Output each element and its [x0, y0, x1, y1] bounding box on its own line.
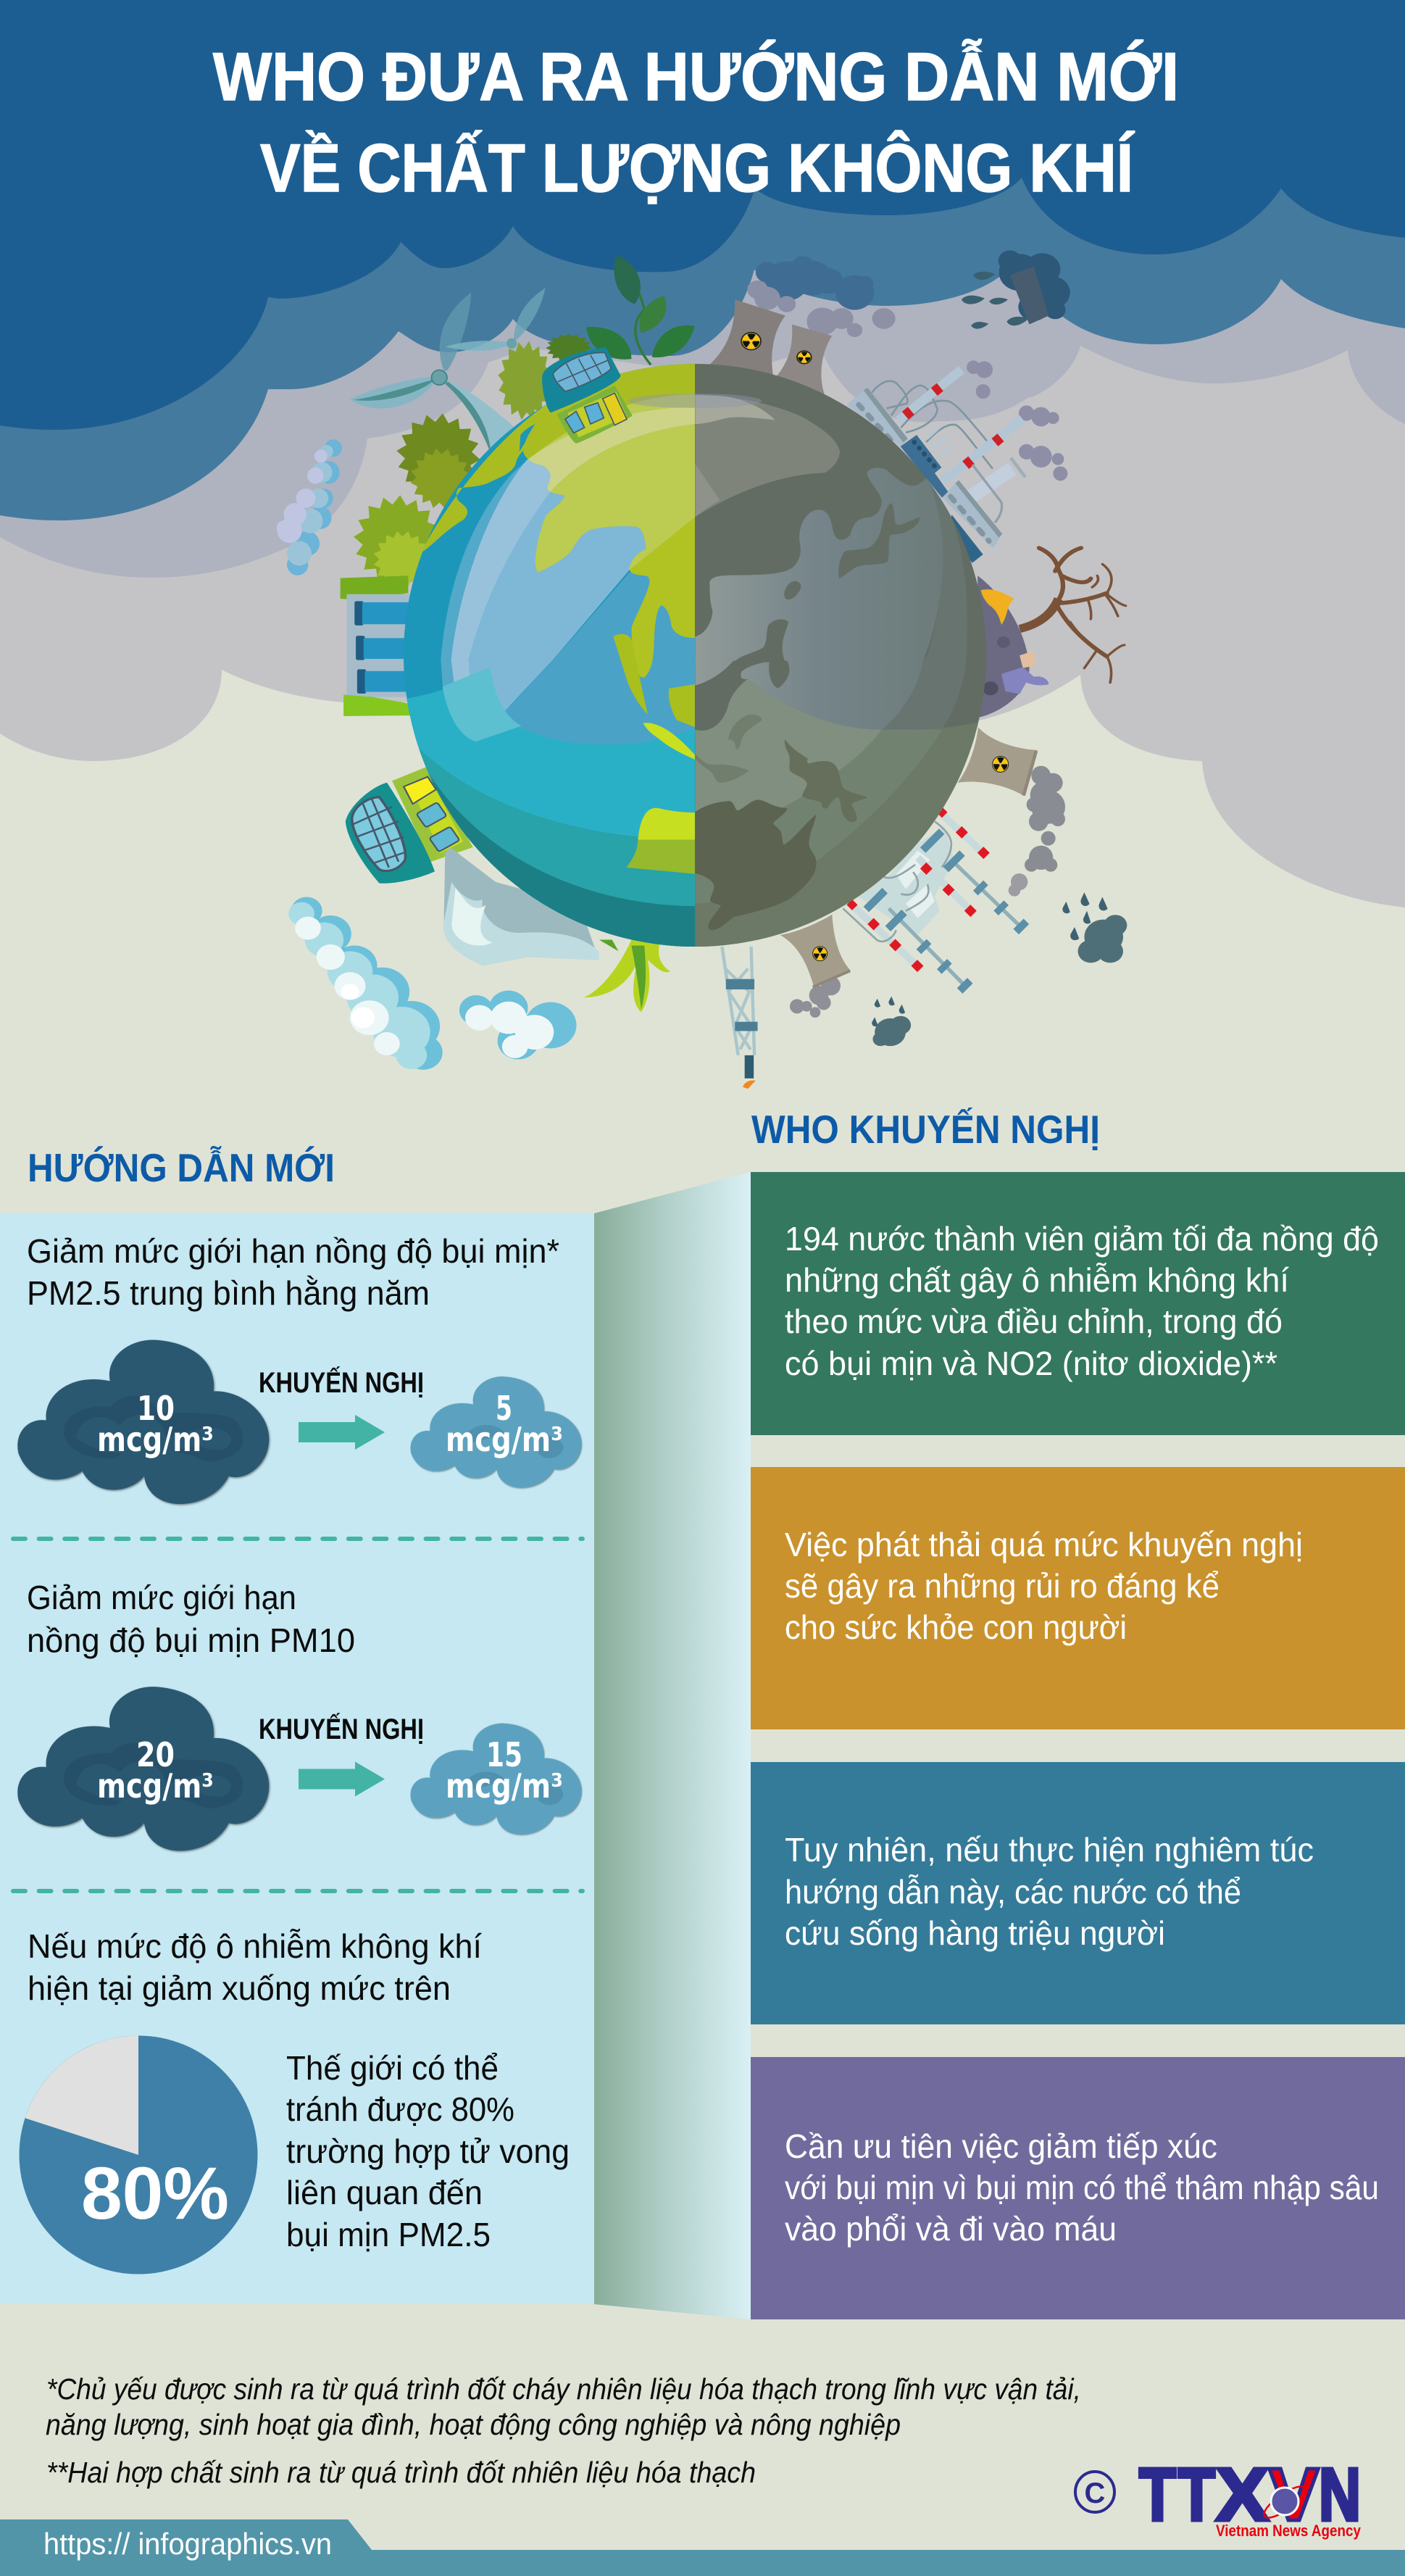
panel: recommendation 1: có bụi mịn và NO2 (nitơ dioxide)**	[785, 1345, 1277, 1382]
icon: nuclear tower and smoke right	[958, 727, 1065, 897]
icon: dark cloud 10	[17, 1340, 269, 1504]
arrow	[299, 1761, 385, 1796]
land: lower hemisphere tones	[695, 657, 988, 966]
text: PM2.5 guideline: Giảm mức giới hạn nồng độ bụi mịn*	[27, 1232, 559, 1270]
value: 10: mcg/m³	[97, 1420, 214, 1459]
value: 10: 10	[137, 1389, 175, 1428]
chart: 80 percent pie	[19, 2035, 258, 2274]
panel: left guidance background	[0, 1213, 594, 2304]
icon: solar house top	[542, 348, 633, 444]
panel: recommendation 1: 194 nước thành viên giảm tối đa nồng độ	[785, 1220, 1379, 1258]
title: VỀ CHẤT LƯỢNG KHÔNG KHÍ	[260, 129, 1135, 206]
panel: recommendation 2: sẽ gây ra những rủi ro đáng kể	[785, 1567, 1220, 1605]
text: PM10 guideline: Giảm mức giới hạn	[27, 1579, 296, 1616]
panel: recommendation 2: cho sức khỏe con người	[785, 1608, 1127, 1646]
globe: clean half	[399, 355, 698, 951]
logo: TTXVN: N	[1319, 2453, 1361, 2536]
icon: bottom left clouds	[288, 897, 577, 1070]
cloud layer: dark blue	[0, 0, 1405, 430]
value: 15: 15	[486, 1735, 522, 1774]
icon: cooling towers top	[701, 299, 832, 400]
text: deaths avoided: Thế giới có thể	[286, 2049, 499, 2087]
text: footnotes: năng lượng, sinh hoạt gia đình, hoạt động công nghiệp và nông nghiệp	[46, 2408, 901, 2441]
label: recommended: KHUYẾN NGHỊ	[259, 1366, 424, 1399]
chart: PM10 clouds	[17, 1687, 581, 1850]
text: footnotes: **Hai hợp chất sinh ra từ quá trình đốt nhiên liệu hóa thạch	[46, 2456, 756, 2489]
chart: PM2.5 clouds	[17, 1340, 581, 1504]
text: PM2.5 guideline: PM2.5 trung bình hằng năm	[27, 1274, 430, 1312]
icon: bottom plant	[583, 939, 670, 1012]
panel: recommendation 3	[751, 1762, 1405, 2024]
value: 20: mcg/m³	[97, 1766, 214, 1806]
panel: recommendation 1	[751, 1172, 1405, 1435]
icon: nuclear tower and smoke bottom	[780, 915, 850, 1018]
panel: recommendation 3: cứu sống hàng triệu người	[785, 1914, 1165, 1952]
logo: TTXVN: C	[1085, 2477, 1105, 2509]
icon: dark smoke top	[747, 256, 896, 337]
value: 20: 20	[136, 1735, 175, 1774]
cloud reflection on globe top	[628, 394, 762, 408]
heading: who recommends: WHO KHUYẾN NGHỊ	[751, 1107, 1100, 1152]
globe	[399, 355, 1000, 966]
icon: small pale cloud left	[277, 439, 342, 576]
icon: light cloud 15	[411, 1724, 581, 1835]
value: 15	[446, 1735, 563, 1806]
land: islands	[613, 634, 695, 874]
logo: TTXVN	[1075, 2453, 1362, 2540]
logo: TTXVN: T	[1178, 2453, 1215, 2536]
label: recommended: KHUYẾN NGHỊ	[259, 1712, 424, 1745]
logo: TTXVN: X	[1216, 2453, 1269, 2536]
arrow	[299, 1415, 385, 1450]
value: 5: 5	[496, 1389, 512, 1428]
text: deaths avoided	[286, 2049, 570, 2253]
text: PM10 guideline	[27, 1579, 355, 1659]
panel: recommendation 1: theo mức vừa điều chỉnh, trong đó	[785, 1302, 1283, 1340]
cloud layer: blue grey	[0, 217, 1405, 578]
text: pollution reduction	[28, 1927, 482, 2007]
land: northern continent	[422, 364, 695, 678]
logo: TTXVN: Vietnam News Agency	[1216, 2522, 1362, 2540]
panel: recommendation 3: Tuy nhiên, nếu thực hiện nghiêm túc	[785, 1831, 1314, 1869]
text: footnotes: *Chủ yếu được sinh ra từ quá trình đốt cháy nhiên liệu hóa thạch trong lĩnh vực vận tải,	[46, 2372, 1081, 2406]
icon: factory bottom right	[843, 807, 1029, 994]
cloud layer: light grey	[0, 290, 1405, 907]
text: deaths avoided: liên quan đến	[286, 2174, 483, 2211]
icon: oil rig	[722, 947, 758, 1089]
icon: wind turbines	[350, 288, 546, 457]
icon: left building	[341, 576, 414, 716]
value: 20	[97, 1735, 214, 1806]
land: upper continent and sea	[695, 395, 967, 661]
panel: recommendation 4: Cần ưu tiên việc giảm tiếp xúc	[785, 2127, 1217, 2165]
text: pollution reduction: Nếu mức độ ô nhiễm không khí	[28, 1927, 482, 1965]
icon: bottom left building	[346, 766, 473, 884]
icon: glacier	[443, 847, 599, 965]
panel: recommendation 4: vào phổi và đi vào máu	[785, 2210, 1117, 2248]
icon: dark cloud 20	[17, 1687, 269, 1850]
illustration: earth half clean half polluted	[277, 250, 1127, 1089]
title	[213, 38, 1179, 206]
logo: TTXVN: T	[1139, 2453, 1176, 2536]
panel: fold connector	[594, 1172, 751, 2319]
chart: 80 percent pie: 80%	[81, 2152, 229, 2235]
footer band	[0, 2519, 1405, 2576]
text: deaths avoided: tránh được 80%	[286, 2090, 514, 2128]
text: PM10 guideline: nồng độ bụi mịn PM10	[27, 1621, 355, 1659]
icon: bushes	[351, 333, 592, 594]
icon: factory top right	[846, 360, 1067, 563]
text: PM2.5 guideline	[27, 1232, 559, 1312]
icon: rain cloud top right	[962, 250, 1070, 329]
value: 5	[446, 1389, 563, 1459]
panel: recommendation 1: những chất gây ô nhiễm không khí	[785, 1261, 1289, 1299]
icon: light cloud 5	[411, 1376, 581, 1487]
text: deaths avoided: trường hợp tử vong	[286, 2132, 570, 2170]
globe: polluted half	[692, 359, 1000, 966]
icon: pollution clouds with drops	[872, 892, 1127, 1046]
value: 5: mcg/m³	[446, 1420, 563, 1459]
heading: new guidance: HƯỚNG DẪN MỚI	[28, 1145, 335, 1190]
title: WHO ĐƯA RA HƯỚNG DẪN MỚI	[213, 38, 1179, 115]
text: deaths avoided: bụi mịn PM2.5	[286, 2216, 491, 2253]
panel: recommendation 2	[751, 1467, 1405, 1729]
text: pollution reduction: hiện tại giảm xuống mức trên	[28, 1969, 451, 2007]
icon: plant top	[586, 255, 695, 365]
logo: TTXVN: V	[1269, 2453, 1319, 2536]
icon: dead tree and waste mound	[977, 548, 1126, 718]
cloud layer: mid blue	[0, 145, 1405, 520]
text: footnotes	[46, 2372, 1081, 2489]
panel: recommendation 2: Việc phát thải quá mức khuyến nghị	[785, 1526, 1303, 1563]
value: 10	[97, 1389, 214, 1459]
panel: recommendation 3: hướng dẫn này, các nước có thể	[785, 1873, 1241, 1911]
footer url: https:// infographics.vn	[43, 2527, 332, 2561]
panel: recommendation 4	[751, 2057, 1405, 2319]
value: 15: mcg/m³	[446, 1766, 563, 1806]
